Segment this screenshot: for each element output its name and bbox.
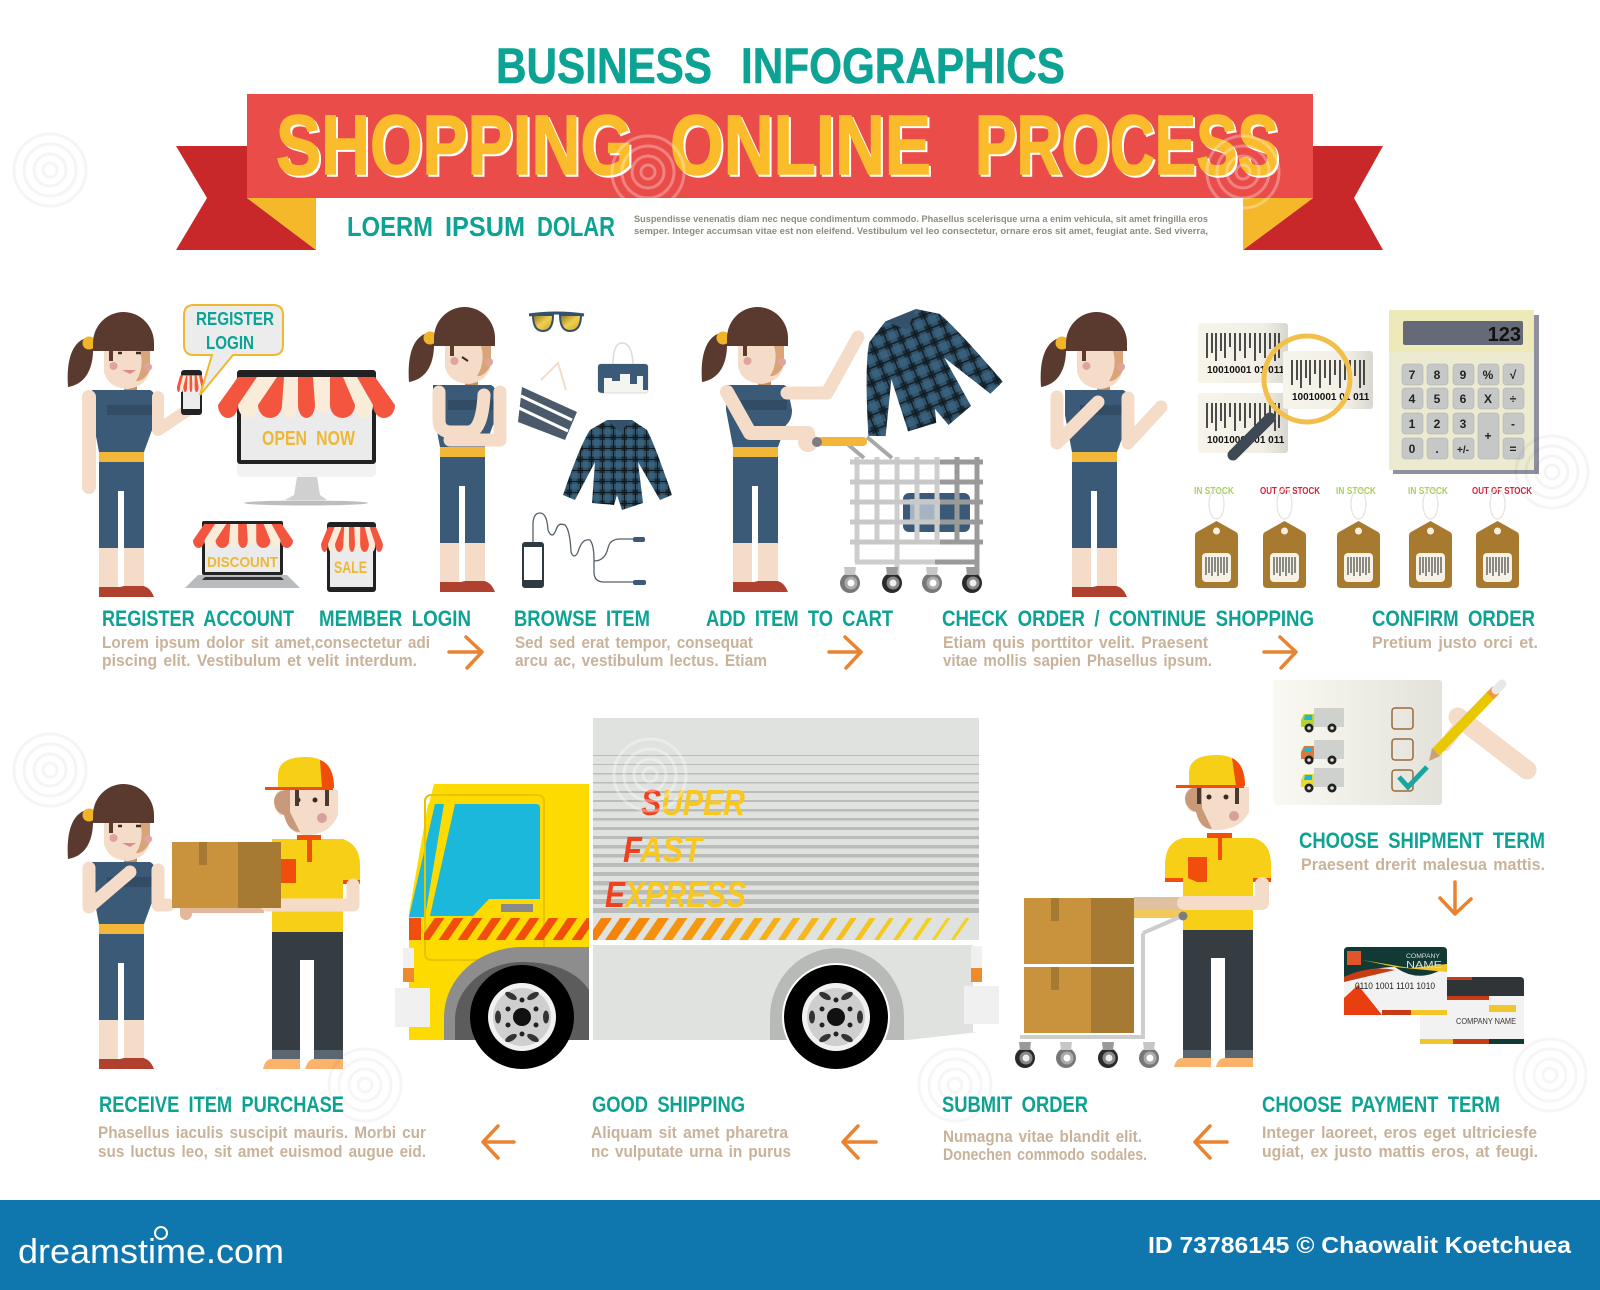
price tags [1195, 489, 1519, 588]
rear wheel [782, 963, 890, 1071]
barcode labels with magnifier [1198, 323, 1373, 455]
front wheel arch [444, 947, 589, 1040]
desktop monitor store: OPEN NOW [262, 428, 355, 450]
register account caption: MEMBER LOGIN [319, 606, 471, 631]
shipment checklist paper [1273, 680, 1442, 805]
register account caption: Lorem ipsum dolor sit amet,consectetur adi [102, 634, 430, 652]
check order caption: vitae mollis sapien Phasellus ipsum. [943, 652, 1212, 670]
good shipping caption: nc vulputate urna in purus [591, 1143, 791, 1161]
confirm order caption: CONFIRM ORDER [1372, 606, 1535, 631]
arrow [843, 1126, 876, 1158]
sunglasses [529, 313, 584, 331]
stock labels: IN STOCK [1194, 486, 1235, 497]
step 4 woman checking order [1041, 312, 1161, 597]
stacked parcels [1024, 898, 1134, 1033]
choose payment term caption: ugiat, ex justo mattis eros, at feugi. [1262, 1143, 1538, 1161]
calculator: . [1435, 442, 1439, 456]
banner heading shadow: SHOPPING [278, 100, 635, 194]
calculator: ÷ [1510, 392, 1517, 406]
plaid shirt [563, 420, 672, 510]
payment card back: COMPANY NAME [1456, 1016, 1516, 1026]
barcode label three [1283, 351, 1373, 409]
phone and charger cable [522, 513, 646, 588]
stripe band on box [593, 918, 970, 940]
banner heading: ONLINE [670, 98, 931, 192]
delivery man with hand truck [1134, 755, 1271, 1067]
rear wheel arch [770, 948, 904, 1040]
stock labels: IN STOCK [1336, 486, 1377, 497]
magnifier [1233, 336, 1350, 455]
good shipping caption: Aliquam sit amet pharetra [591, 1124, 789, 1142]
add item to cart caption: ADD ITEM TO CART [706, 606, 893, 631]
calculator: - [1511, 417, 1515, 431]
browse item caption: BROWSE ITEM [514, 606, 650, 631]
calculator: 0 [1409, 442, 1416, 456]
right ribbon tail [1243, 146, 1383, 250]
tablet sale [321, 522, 383, 592]
intro text: semper. Integer accumsan vitae est non eleifend. Vestibulum vel leo consectetur, ornare eros sit amet, feugiat ante. Sed viverra, [634, 226, 1208, 237]
right fold [1243, 198, 1313, 250]
intro text [634, 214, 1208, 237]
stock labels [1194, 486, 1533, 497]
choose shipment term caption: CHOOSE SHIPMENT TERM [1299, 828, 1545, 853]
check order caption: Etiam quis porttitor velit. Praesent [943, 634, 1208, 652]
title: business infographics [496, 38, 1065, 94]
choose payment term caption: CHOOSE PAYMENT TERM [1262, 1092, 1500, 1117]
calculator: 6 [1460, 392, 1467, 406]
truck slogan: EXPRESS [605, 874, 746, 915]
subheading: IPSUM [445, 211, 525, 242]
parcel [172, 842, 281, 908]
banner heading: PROCESS [975, 98, 1279, 192]
good shipping caption: GOOD SHIPPING [592, 1092, 745, 1117]
subheading: DOLAR [537, 211, 615, 242]
payment card front: NAME [1406, 960, 1442, 971]
calculator: 4 [1409, 392, 1416, 406]
logo spiral [155, 1227, 167, 1239]
payment card front [1344, 947, 1447, 1015]
choose payment term caption [1262, 1092, 1538, 1161]
register account caption: piscing elit. Vestibulum et velit interdum. [102, 652, 417, 670]
barcode label one: 10010001 01 011 [1207, 365, 1285, 376]
delivery man with parcel [180, 757, 360, 1069]
browse item caption: arcu ac, vestibulum lectus. Etiam [515, 652, 767, 670]
submit order caption: Numagna vitae blandit elit. [943, 1128, 1142, 1146]
speech bubble register login: LOGIN [206, 333, 254, 353]
plaid shirt on hanger [831, 289, 1010, 454]
truck slogan [605, 782, 746, 915]
banner band [247, 94, 1313, 198]
calculator: 1 [1409, 417, 1416, 431]
calculator: % [1483, 368, 1494, 382]
check order caption [942, 606, 1314, 670]
step 5 woman receiving parcel [68, 784, 168, 1069]
subheading [347, 211, 615, 242]
striped bag [518, 363, 577, 440]
receive item caption: sus luctus leo, sit amet euismod augue eid. [98, 1143, 426, 1161]
choose payment term caption: Integer laoreet, eros eget ultriciesfe [1262, 1124, 1537, 1142]
arrow down [1440, 882, 1471, 914]
calculator: 3 [1460, 417, 1467, 431]
hand holding pencil [1429, 684, 1527, 770]
browse item caption [514, 606, 767, 670]
payment card front: 0110 1001 1101 1010 [1355, 981, 1435, 991]
shopping cart [812, 437, 983, 593]
front bumper and lights [395, 948, 430, 1027]
subheading: LOERM [347, 211, 433, 242]
intro text: Suspendisse venenatis diam nec neque condimentum commodo. Phasellus scelerisque urna a enim vehicula, sit amet fringilla eros [634, 214, 1208, 225]
laptop discount [185, 521, 300, 588]
calculator [1389, 310, 1539, 474]
calculator: = [1509, 442, 1517, 456]
good shipping caption [591, 1092, 791, 1161]
front wheel [470, 965, 574, 1069]
title: business infographics: INFOGRAPHICS [741, 38, 1065, 94]
arrow [449, 637, 482, 668]
register account caption: REGISTER ACCOUNT [102, 606, 294, 631]
receive item caption: RECEIVE ITEM PURCHASE [99, 1092, 344, 1117]
receive item caption [98, 1092, 427, 1161]
payment card front: COMPANY [1406, 954, 1440, 960]
speech bubble register login [184, 305, 283, 395]
arrow [483, 1126, 514, 1158]
calculator: 5 [1434, 392, 1441, 406]
choose shipment term caption [1299, 828, 1545, 874]
rear bumper and lights [964, 946, 999, 1024]
confirm order caption [1372, 606, 1538, 652]
stock labels: OUT OF STOCK [1260, 486, 1321, 497]
calculator: 2 [1434, 417, 1441, 431]
submit order caption [942, 1092, 1147, 1164]
truck slogan: SUPER [641, 782, 745, 823]
step 1 woman with phone [68, 312, 188, 597]
speech bubble register login: REGISTER [196, 309, 274, 329]
cab [409, 784, 595, 1040]
laptop discount: DISCOUNT [207, 554, 278, 571]
banner ribbon [176, 94, 1383, 250]
calculator: +/- [1457, 445, 1469, 456]
tablet sale: SALE [334, 558, 367, 577]
stock labels: IN STOCK [1408, 486, 1449, 497]
submit order caption: Donechen commodo sodales. [943, 1146, 1147, 1164]
calculator: 7 [1409, 368, 1416, 382]
arrow [1195, 1126, 1227, 1158]
register account caption [102, 606, 471, 670]
truck slogan: FAST [623, 829, 705, 870]
footer bar [0, 1200, 1600, 1290]
calculator: 8 [1434, 368, 1441, 382]
footer credit: ID 73786145 © Chaowalit Koetchuea [1148, 1232, 1571, 1258]
left ribbon tail [176, 146, 316, 250]
barcode label three: 10010001 01 011 [1292, 392, 1370, 403]
calculator: + [1484, 429, 1492, 443]
calculator: 9 [1460, 368, 1467, 382]
watermark spirals [14, 134, 1588, 1121]
left fold [247, 198, 316, 250]
title: business infographics: BUSINESS [496, 38, 712, 94]
receive item caption: Phasellus iaculis suscipit mauris. Morbi cur [98, 1124, 427, 1142]
banner heading [276, 98, 1279, 192]
handbag [598, 343, 648, 393]
barcode label two [1198, 393, 1288, 453]
calculator: √ [1510, 368, 1517, 382]
barcode label two: 10010001 01 011 [1207, 435, 1285, 446]
cargo box [593, 718, 979, 1040]
hand truck [1015, 912, 1188, 1068]
barcode label one [1198, 323, 1288, 383]
browse item caption: Sed sed erat tempor, consequat [515, 634, 753, 652]
step 3 woman adding to cart [702, 307, 858, 592]
check order caption: CHECK ORDER / CONTINUE SHOPPING [942, 606, 1314, 631]
step 2 woman thinking [409, 307, 500, 592]
calculator: X [1484, 392, 1492, 406]
banner heading shadow: ONLINE [672, 100, 933, 194]
confirm order caption: Pretium justo orci et. [1372, 634, 1538, 652]
banner heading: SHOPPING [276, 98, 633, 192]
front inner arch [455, 962, 589, 1040]
stock labels: OUT OF STOCK [1472, 486, 1533, 497]
arrow [829, 637, 861, 668]
payment card back [1420, 977, 1524, 1044]
banner heading shadow [278, 100, 1281, 194]
banner heading shadow: PROCESS [977, 100, 1281, 194]
choose shipment term caption: Praesent drerit malesua mattis. [1301, 856, 1545, 874]
desktop monitor store [218, 370, 395, 506]
arrow [1264, 637, 1296, 668]
delivery truck [395, 718, 999, 1071]
footer logo: dreamstime.com [18, 1233, 284, 1271]
submit order caption: SUBMIT ORDER [942, 1092, 1088, 1117]
phone [177, 370, 205, 415]
calculator: 123 [1488, 324, 1521, 346]
